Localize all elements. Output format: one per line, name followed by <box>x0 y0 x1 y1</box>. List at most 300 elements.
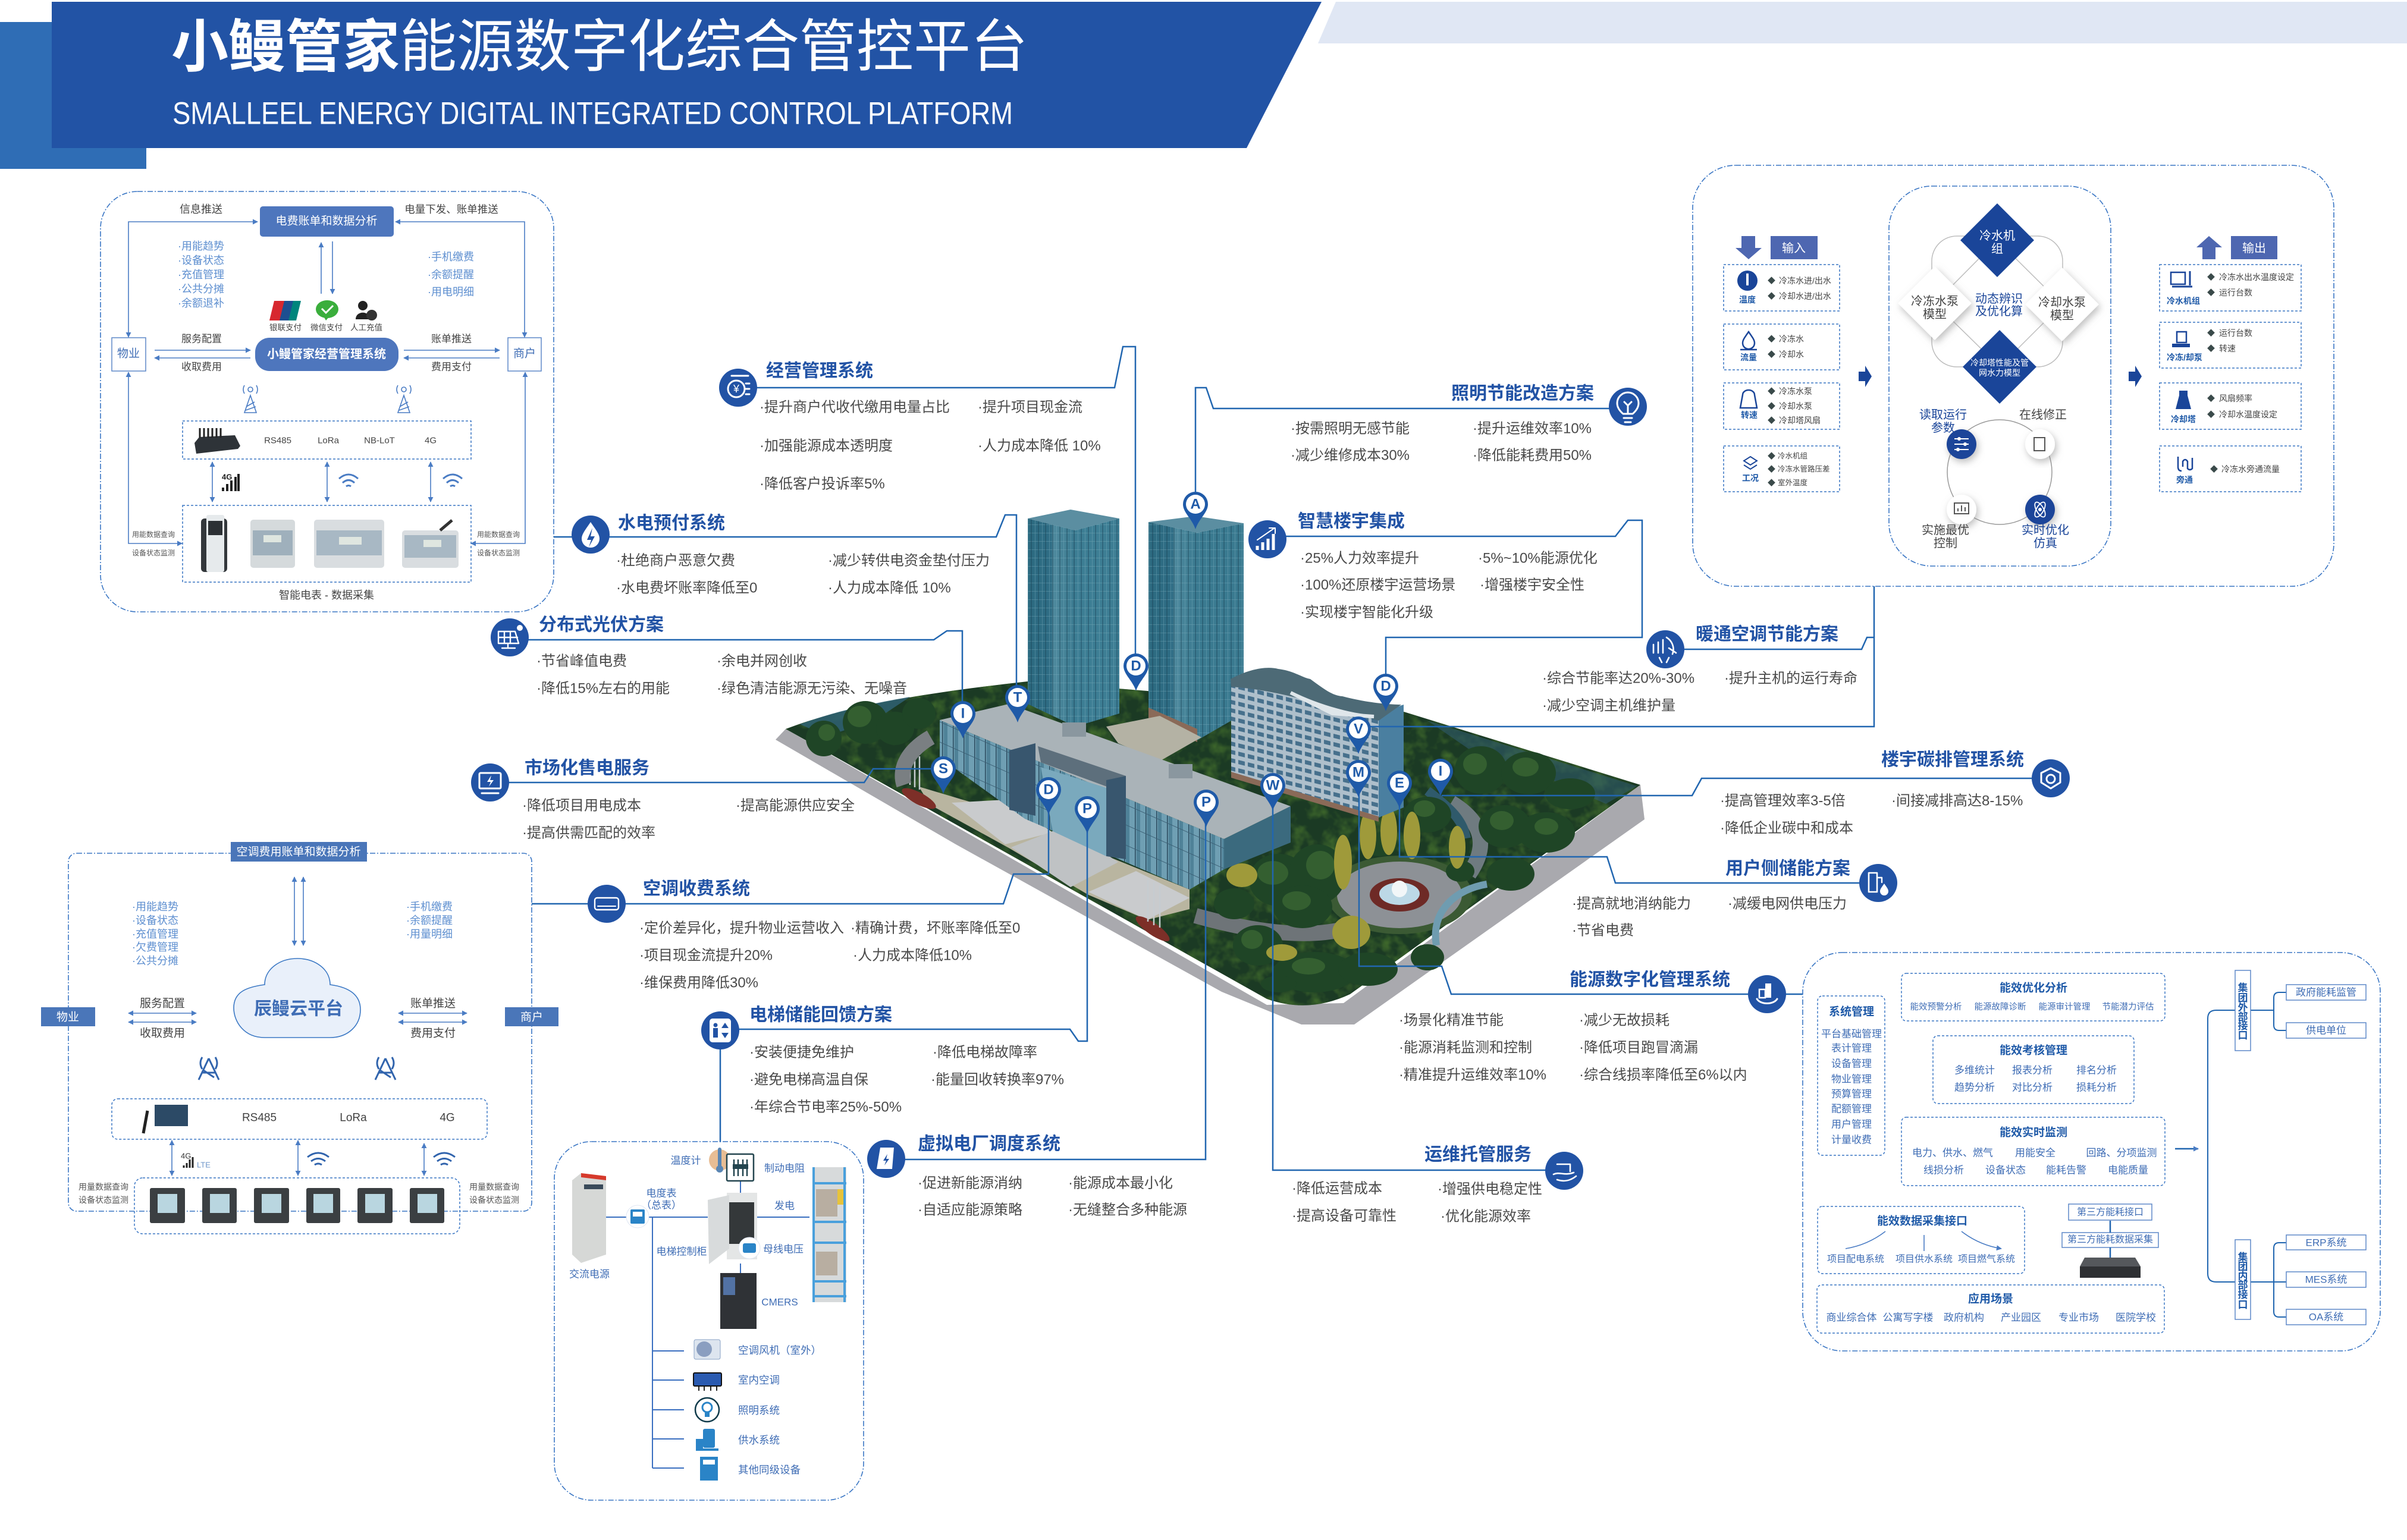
benefits: ·精确计费，坏账率降低至0 <box>851 920 1020 936</box>
box: bill analysis <box>260 206 394 237</box>
right tower <box>1148 516 1244 533</box>
output header: 输出 <box>2242 241 2266 255</box>
data labels: 用能数据查询 <box>477 530 520 539</box>
box: external interface <box>2235 970 2251 1051</box>
map pins: T <box>1013 690 1022 705</box>
section: 水电预付系统 <box>554 514 1016 690</box>
box: tenant <box>505 1007 558 1026</box>
box: management system: 小鳗管家经营管理系统 <box>267 347 386 361</box>
benefits: ·按需照明无感节能 <box>1291 421 1410 436</box>
section: 电梯储能回馈方案 <box>701 824 1087 1142</box>
icon: 4G LTE: 4G <box>181 1151 191 1161</box>
benefits: ·定价差异化，提升物业运营收入 <box>639 920 844 936</box>
input: conditions: 室外温度 <box>1778 478 1808 487</box>
output: cooling tower: 冷却水温度设定 <box>2219 410 2277 419</box>
output: cooling tower <box>2160 383 2301 429</box>
leader <box>738 347 1135 660</box>
box: external interface: 团 <box>2237 992 2248 1004</box>
data labels <box>132 530 520 557</box>
benefits <box>522 798 855 841</box>
box: external interface: 接 <box>2237 1020 2248 1031</box>
boxes: external systems: 政府能耗监管 <box>2296 987 2356 998</box>
title: 小鳗管家能源数字化综合管控平台 <box>171 15 1028 78</box>
list: property functions: ·充值管理 <box>178 269 224 281</box>
interface connectors <box>2208 992 2286 1317</box>
box: AC bill analysis: 空调费用账单和数据分析 <box>236 846 361 859</box>
box: system management: 计量收费 <box>1831 1134 1872 1145</box>
box: system management: 预算管理 <box>1831 1088 1872 1100</box>
heading: 水电预付系统 <box>618 514 725 533</box>
box: communication: 4G <box>440 1112 455 1124</box>
box: internal interface <box>2235 1240 2251 1319</box>
output: bypass <box>2160 446 2301 492</box>
box: assessment: 对比分析 <box>2012 1082 2053 1093</box>
box: assessment: 报表分析 <box>2012 1064 2053 1076</box>
benefits: ·精准提升运维效率10% <box>1399 1067 1546 1083</box>
data labels: 用能数据查询 <box>132 530 175 539</box>
service labels <box>140 997 456 1039</box>
low building <box>940 720 1224 890</box>
list: property: ·用能趋势 <box>132 901 178 913</box>
output: chiller: 运行台数 <box>2219 288 2252 297</box>
icon: lighting <box>695 1398 719 1422</box>
benefits <box>1399 1012 1747 1083</box>
box: assessment: 损耗分析 <box>2076 1082 2117 1093</box>
box: assessment: 趋势分析 <box>1954 1082 1995 1093</box>
list: tenant: ·用量明细 <box>406 928 453 940</box>
section: 暖通空调节能方案 <box>1368 586 1874 727</box>
leader <box>1399 803 1878 883</box>
labels: 发电 <box>774 1200 795 1212</box>
node: correct <box>2025 429 2055 459</box>
box: tenant: 商户 <box>513 347 536 360</box>
list: property: ·充值管理 <box>132 928 178 940</box>
box: scenarios <box>1817 1285 2164 1333</box>
map pins <box>931 492 1453 834</box>
icon <box>867 1140 905 1178</box>
input: speed <box>1724 383 1840 429</box>
box: external interface: 口 <box>2237 1030 2248 1041</box>
output: bypass: 旁通 <box>2176 475 2193 485</box>
heading: 楼宇碳排管理系统 <box>1881 750 2024 769</box>
benefits <box>1720 793 2023 836</box>
leader <box>720 824 1087 1041</box>
heading: 经营管理系统 <box>766 362 873 381</box>
benefits <box>760 400 1101 492</box>
arrow: to model <box>1859 366 1872 387</box>
input: flow: ◆ <box>1768 350 1775 359</box>
icon: 4G signal <box>222 472 238 491</box>
box: optimisation: 能效预警分析 <box>1910 1002 1962 1012</box>
icon: 4G signal: 4G <box>222 472 232 482</box>
box: monitoring <box>1901 1117 2165 1186</box>
box: assessment: 能效考核管理 <box>2000 1043 2067 1057</box>
box: communication: RS485 <box>264 435 291 446</box>
box: external interface: 部 <box>2237 1011 2248 1023</box>
box: optimisation <box>1901 973 2165 1021</box>
section: 分布式光伏方案 <box>491 615 962 708</box>
icon: 4G LTE <box>181 1151 211 1169</box>
output: chiller <box>2160 265 2301 311</box>
box: management system <box>255 338 398 371</box>
heading: 空调收费系统 <box>643 879 750 899</box>
icon: ¥ <box>733 383 740 395</box>
leader <box>1359 791 1803 994</box>
box: communication: LoRa <box>318 435 340 446</box>
list: tenant functions: ·手机缴费 <box>428 251 474 263</box>
boxes: external systems: OA系统 <box>2309 1312 2343 1322</box>
leader <box>1267 520 1642 678</box>
output: chiller: 冷冻水出水温度设定 <box>2219 272 2294 282</box>
benefits: ·提升项目现金流 <box>978 400 1082 415</box>
benefits: ·100%还原楼宇运营场景 <box>1300 577 1455 593</box>
service labels: 费用支付 <box>410 1026 456 1039</box>
output: cooling tower: ◆ <box>2207 394 2215 403</box>
icon: switch <box>2080 1258 2141 1278</box>
benefits: ·能量回收转换率97% <box>931 1071 1064 1088</box>
icon <box>701 1011 739 1049</box>
heading: 运维托管服务 <box>1424 1145 1532 1164</box>
benefits: ·促进新能源消纳 <box>918 1175 1022 1192</box>
input: speed: 冷却塔风扇 <box>1779 416 1821 425</box>
map pins: A <box>1190 496 1201 513</box>
optimisation loop <box>1919 408 2069 550</box>
input: conditions <box>1724 446 1840 492</box>
icon <box>719 369 757 407</box>
benefits: ·人力成本降低10% <box>853 948 972 963</box>
heading: 用户侧储能方案 <box>1725 859 1850 879</box>
box: internal interface: 团 <box>2237 1261 2248 1272</box>
data labels: 用量数据查询 <box>469 1182 519 1192</box>
benefits: ·场景化精准节能 <box>1399 1012 1504 1029</box>
benefits: ·5%~10%能源优化 <box>1478 551 1598 566</box>
service labels: 服务配置 <box>140 997 185 1010</box>
benefits: ·综合节能率达20%-30% <box>1542 671 1694 686</box>
loop labels <box>1919 408 2069 550</box>
output: pumps <box>2160 322 2301 368</box>
curved building <box>1231 684 1379 818</box>
benefits <box>616 553 990 596</box>
benefits <box>1291 421 1592 464</box>
benefits: ·绿色清洁能源无污染、无噪音 <box>717 680 907 697</box>
output: chiller: ◆ <box>2207 272 2215 282</box>
box: monitoring: 回路、分项监测 <box>2086 1148 2157 1158</box>
boxes: external systems: 供电单位 <box>2306 1025 2346 1036</box>
diamond: chiller <box>1960 203 2034 277</box>
benefits: ·自适应能源策略 <box>918 1202 1022 1218</box>
leader <box>510 631 962 708</box>
third-party interface <box>2062 1204 2158 1278</box>
labels: 电梯控制柜 <box>657 1246 707 1257</box>
arrow: to output <box>2129 366 2142 387</box>
map pins: D <box>1043 781 1054 798</box>
list: tenant: ·余额提醒 <box>406 914 453 926</box>
map pins: P <box>1201 794 1211 810</box>
box: system management: 配额管理 <box>1831 1104 1872 1114</box>
output: cooling tower: 冷却塔 <box>2171 414 2196 424</box>
box: assessment: 多维统计 <box>1954 1064 1995 1076</box>
arrow: to interfaces <box>2175 1148 2198 1149</box>
output: pumps: 运行台数 <box>2219 328 2252 338</box>
benefits: ·降低电梯故障率 <box>933 1044 1037 1061</box>
flow arrows <box>128 222 525 543</box>
box: data acquisition: 项目供水系统 <box>1896 1253 1953 1264</box>
leader <box>490 769 933 782</box>
benefits: ·降低项目跑冒滴漏 <box>1579 1039 1698 1056</box>
leader <box>1442 778 2051 796</box>
benefits: ·实现楼宇智能化升级 <box>1300 604 1433 621</box>
labels: 制动电阻 <box>764 1163 805 1174</box>
service labels: 收取费用 <box>181 362 222 372</box>
service labels <box>181 333 472 372</box>
center label: 动态辨识 <box>1975 292 2023 306</box>
box: AC bill analysis <box>231 842 367 862</box>
left tower <box>1028 510 1119 530</box>
list: property functions: ·设备状态 <box>178 254 224 266</box>
benefits: ·人力成本降低 10% <box>828 580 951 596</box>
loop labels: 读取运行 <box>1919 408 1967 422</box>
diamond: chilled pump <box>1898 266 1972 340</box>
header banner <box>0 2 2407 169</box>
icon: indoor AC <box>693 1373 721 1391</box>
box: smart meters <box>183 505 471 582</box>
box: internal interface: 部 <box>2237 1278 2248 1290</box>
list: tenant <box>406 901 453 940</box>
box: monitoring: 电力、供水、燃气 <box>1912 1148 1993 1158</box>
input: speed: 冷冻水泵 <box>1779 386 1812 396</box>
box: property <box>112 338 146 371</box>
panel: billing system overview <box>101 191 554 612</box>
service labels: 收取费用 <box>140 1026 185 1039</box>
icon <box>1646 630 1684 668</box>
input: flow: 冷却水 <box>1779 350 1804 359</box>
CMERS device <box>720 1273 757 1329</box>
diamond: tower <box>1963 330 2036 404</box>
boxes: external systems: ERP系统 <box>2306 1237 2346 1249</box>
data labels: 设备状态监测 <box>79 1195 128 1205</box>
boxes: external systems <box>2286 985 2366 1325</box>
panel: elevator energy recovery <box>554 1142 864 1500</box>
loop labels: 控制 <box>1934 536 1957 550</box>
benefits: ·降低企业碳中和成本 <box>1720 821 1853 836</box>
icon: wechat pay <box>316 300 338 320</box>
labels <box>641 1155 805 1308</box>
benefits: ·提高就地消纳能力 <box>1572 895 1691 912</box>
list: tenant functions: ·余额提醒 <box>428 269 474 281</box>
roads <box>902 737 931 785</box>
box: optimisation: 能源故障诊断 <box>1975 1001 2026 1012</box>
input: flow: 流量 <box>1740 353 1757 362</box>
heading: 分布式光伏方案 <box>539 615 664 635</box>
section: 经营管理系统 <box>719 347 1135 660</box>
benefits: ·无缝整合多种能源 <box>1068 1202 1187 1218</box>
subtitle: SMALLEEL ENERGY DIGITAL INTEGRATED CONTROL PLATFORM <box>172 96 1013 131</box>
service labels: 服务配置 <box>181 333 222 345</box>
map pins: I <box>1439 763 1442 779</box>
label: 交流电源 <box>569 1269 610 1280</box>
box: optimisation: 能源审计管理 <box>2039 1002 2091 1012</box>
section: 照明节能改造方案 <box>1195 384 1647 494</box>
box: system management <box>1818 996 1885 1155</box>
data labels: 设备状态监测 <box>132 549 175 557</box>
benefits: ·减少维修成本30% <box>1291 447 1410 464</box>
output: cooling tower: ◆ <box>2207 410 2215 419</box>
box: scenarios: 应用场景 <box>1968 1291 2013 1306</box>
diamond: cooling pump: 冷却水泵 <box>2038 296 2086 309</box>
input: conditions: 冷水机组 <box>1778 452 1807 460</box>
icon: meter <box>626 1205 649 1228</box>
output: pumps: ◆ <box>2207 328 2215 338</box>
data labels: 设备状态监测 <box>477 549 520 557</box>
benefits <box>749 1044 1064 1115</box>
labels: 温度计 <box>671 1155 701 1167</box>
data labels <box>79 1182 519 1205</box>
benefits: ·提升运维效率10% <box>1473 421 1592 436</box>
box: property: 物业 <box>57 1011 79 1024</box>
box: scenarios: 医院学校 <box>2116 1312 2156 1324</box>
icon: wifi <box>339 474 462 486</box>
leader <box>1368 637 1874 727</box>
benefits: ·降低15%左右的用能 <box>536 680 670 697</box>
service labels: 账单推送 <box>431 333 472 345</box>
section: 虚拟电厂调度系统 <box>867 819 1206 1218</box>
output header <box>2196 236 2277 259</box>
benefits: ·杜绝商户恶意欠费 <box>616 553 735 568</box>
box: scenarios: 产业园区 <box>2001 1312 2041 1324</box>
trees <box>806 698 1595 992</box>
benefits: ·安装便捷免维护 <box>749 1044 854 1061</box>
output: chiller: ◆ <box>2207 288 2215 297</box>
map pins: D <box>1380 678 1391 694</box>
list: property functions: ·余额退补 <box>178 297 224 309</box>
icon: 4G LTE: LTE <box>197 1161 211 1169</box>
benefits: ·余电并网创收 <box>717 653 807 670</box>
payment labels <box>269 323 382 332</box>
plaza <box>919 787 1190 920</box>
labels: （总表） <box>641 1200 682 1211</box>
benefits: ·降低能耗费用50% <box>1473 447 1592 464</box>
icon: radio towers <box>243 385 411 413</box>
feedback labels: 电量下发、账单推送 <box>404 203 498 215</box>
benefits: ·提升主机的运行寿命 <box>1724 671 1857 686</box>
section: 运维托管服务 <box>1273 803 1583 1225</box>
leader <box>1195 388 1628 494</box>
section: 智慧楼宇集成 <box>1248 511 1642 678</box>
boxes: external systems: MES系统 <box>2305 1274 2347 1286</box>
benefits: ·减少空调主机维护量 <box>1542 698 1675 714</box>
icon <box>1859 864 1897 902</box>
diamond: cooling pump <box>2025 268 2099 341</box>
elevator <box>812 1167 846 1302</box>
list: tenant: ·手机缴费 <box>406 901 453 913</box>
center label: 及优化算 <box>1975 304 2023 318</box>
map pins: P <box>1082 800 1092 817</box>
payment labels: 微信支付 <box>310 323 343 332</box>
benefits: ·提高设备可靠性 <box>1292 1208 1397 1224</box>
diamond: chilled pump: 冷冻水泵 <box>1911 294 1959 308</box>
output: cooling tower: 风扇频率 <box>2219 394 2252 403</box>
connector to elevator panel <box>720 1049 721 1142</box>
benefits: ·能源成本最小化 <box>1068 1175 1173 1192</box>
icon: wifi <box>307 1153 455 1165</box>
diamond: chilled pump: 模型 <box>1923 307 1947 321</box>
benefits: ·水电费坏账率降低至0 <box>616 580 757 596</box>
panel: air-conditioning billing <box>41 842 558 1234</box>
input: conditions: ◆ <box>1768 452 1775 460</box>
wiring <box>605 1181 809 1468</box>
icon <box>471 763 509 802</box>
list: property functions: ·公共分摊 <box>178 283 224 295</box>
box: scenarios: 政府机构 <box>1944 1312 1984 1324</box>
leader <box>886 819 1206 1159</box>
benefits: ·增强楼宇安全性 <box>1480 577 1584 593</box>
loop labels: 在线修正 <box>2019 408 2067 422</box>
box: internal interface: 集 <box>2237 1251 2248 1263</box>
leader <box>554 515 1016 690</box>
list: property functions <box>178 240 224 309</box>
heading: 电梯储能回馈方案 <box>749 1005 892 1025</box>
input header: 输入 <box>1782 241 1806 255</box>
model diagram <box>1898 203 2099 404</box>
benefits: ·降低项目用电成本 <box>522 798 641 813</box>
benefits <box>1572 895 1847 938</box>
icon <box>1748 975 1786 1013</box>
box: communication <box>112 1099 487 1139</box>
box: system management: 系统管理 <box>1829 1005 1874 1018</box>
box: system management: 用户管理 <box>1831 1119 1872 1130</box>
data labels: 设备状态监测 <box>469 1195 519 1205</box>
input: temperature: 冷冻水进/出水 <box>1779 276 1831 285</box>
output: bypass: ◆ <box>2210 465 2218 473</box>
section: 空调收费系统 <box>532 806 1049 991</box>
central building illustration <box>776 510 1645 1024</box>
benefits <box>536 653 907 697</box>
box: assessment <box>1933 1036 2134 1104</box>
payment labels: 人工充值 <box>350 323 382 332</box>
input: flow: ◆ <box>1768 334 1775 344</box>
loop labels: 参数 <box>1931 421 1955 435</box>
benefits <box>639 920 1020 991</box>
connector to HVAC panel <box>1873 586 1875 637</box>
payment labels: 银联支付 <box>269 323 302 332</box>
box: monitoring: 用能安全 <box>2015 1148 2055 1158</box>
box: tenant <box>508 338 541 371</box>
section: 能源数字化管理系统 <box>1359 791 1803 1083</box>
node: read <box>1947 429 1976 459</box>
map pins: S <box>939 761 948 777</box>
benefits: ·节省电费 <box>1572 923 1634 938</box>
list: property <box>132 901 178 967</box>
input: temperature: ◆ <box>1768 291 1775 301</box>
box: data acquisition: 项目配电系统 <box>1827 1253 1884 1264</box>
cloud platform <box>234 958 360 1038</box>
icon <box>572 516 610 554</box>
output: pumps: 转速 <box>2219 344 2236 353</box>
heading: 照明节能改造方案 <box>1451 384 1594 403</box>
loop labels: 仿真 <box>2033 536 2057 550</box>
box: data acquisition <box>1818 1206 2025 1274</box>
icon <box>588 885 626 923</box>
diamond: tower: 网水力模型 <box>1979 368 2020 378</box>
box: tenant: 商户 <box>520 1011 543 1024</box>
panel: HVAC optimisation <box>1693 165 2334 586</box>
list: property: ·公共分摊 <box>132 955 178 967</box>
box: optimisation: 能效优化分析 <box>2000 981 2067 994</box>
benefits: ·25%人力效率提升 <box>1300 551 1419 566</box>
third-party interface: 第三方能耗接口 <box>2077 1207 2144 1218</box>
leader <box>1273 803 1564 1170</box>
leader <box>532 806 1049 904</box>
